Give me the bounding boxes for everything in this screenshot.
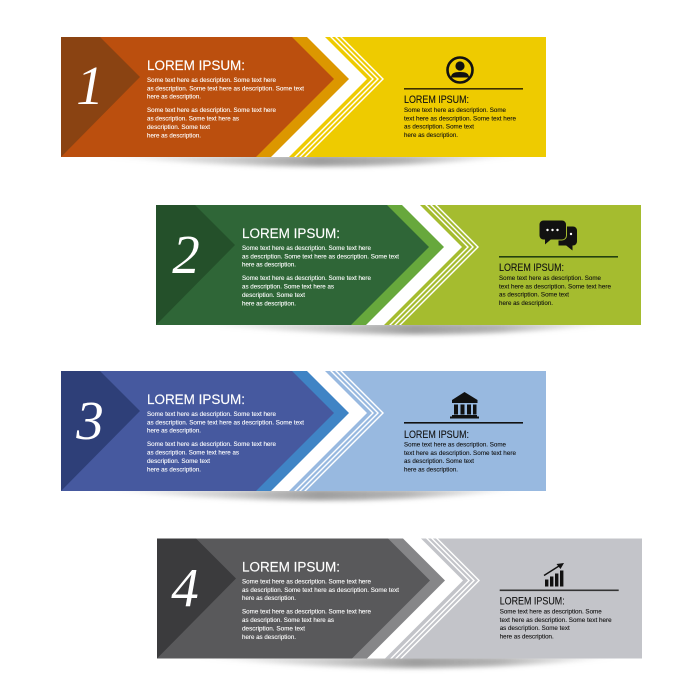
left description: Some text here as description. Some text here bbox=[147, 77, 276, 84]
left heading: LOREM IPSUM: bbox=[147, 392, 245, 407]
left description: Some text here as description. Some text here bbox=[242, 275, 371, 282]
number 1: 1 bbox=[76, 55, 104, 116]
left description: description. Some text bbox=[147, 124, 210, 131]
left description: Some text here as description. Some text here bbox=[242, 245, 371, 252]
shadow 4 bbox=[191, 656, 621, 668]
right description: here as description. bbox=[500, 634, 554, 640]
left description: as description. Some text here as description. Some text bbox=[147, 86, 304, 92]
panel: grey background bbox=[157, 538, 642, 658]
accent chevron bbox=[61, 371, 349, 491]
left description: Some text here as description. Some text here bbox=[147, 441, 276, 448]
right heading: LOREM IPSUM: bbox=[404, 429, 469, 441]
left description: here as description. bbox=[147, 94, 201, 100]
accent chevron bbox=[157, 538, 445, 658]
right description: as description. Some text bbox=[404, 458, 474, 465]
right description: Some text here as description. Some bbox=[500, 608, 602, 616]
divider bbox=[404, 422, 523, 424]
icon: person bbox=[448, 58, 472, 82]
right description: here as description. bbox=[499, 300, 553, 307]
left description: description. Some text bbox=[242, 292, 305, 299]
number 3: 3 bbox=[75, 390, 104, 451]
number triangle bbox=[61, 37, 140, 157]
left description: as description. Some text here as description. Some text bbox=[242, 254, 399, 260]
number 4: 4 bbox=[171, 558, 199, 618]
main arrow bbox=[156, 205, 429, 325]
left heading: LOREM IPSUM: bbox=[242, 560, 340, 574]
left description: as description. Some text here as description. Some text bbox=[242, 587, 399, 594]
white stripes chevron bbox=[157, 538, 480, 658]
left description bbox=[242, 578, 399, 641]
right heading: LOREM IPSUM: bbox=[499, 262, 564, 274]
right description: here as description. bbox=[404, 132, 458, 139]
icon: bank building bbox=[450, 392, 479, 418]
shadow 3 bbox=[95, 489, 525, 500]
accent chevron bbox=[156, 205, 444, 325]
right description bbox=[404, 442, 516, 474]
divider bbox=[499, 256, 618, 258]
left description: as description. Some text here as bbox=[242, 284, 334, 290]
left description: Some text here as description. Some text here bbox=[147, 411, 276, 418]
right description: Some text here as description. Some bbox=[404, 107, 506, 114]
banner 1 bbox=[61, 37, 546, 166]
white stripes chevron bbox=[61, 371, 384, 491]
left description: Some text here as description. Some text here bbox=[242, 608, 371, 616]
left heading: LOREM IPSUM: bbox=[147, 58, 245, 73]
number triangle bbox=[157, 538, 236, 658]
right heading: LOREM IPSUM: bbox=[404, 94, 469, 106]
left description: here as description. bbox=[242, 262, 296, 268]
main arrow bbox=[61, 37, 334, 157]
left heading: LOREM IPSUM: bbox=[242, 226, 340, 241]
panel: green background bbox=[156, 205, 641, 325]
left description bbox=[242, 245, 399, 308]
shadow 2 bbox=[190, 323, 620, 334]
right description: Some text here as description. Some bbox=[499, 275, 601, 282]
right heading: LOREM IPSUM: bbox=[500, 596, 565, 608]
left description: Some text here as description. Some text here bbox=[147, 107, 276, 114]
left description: here as description. bbox=[242, 634, 296, 641]
right description: Some text here as description. Some bbox=[404, 442, 506, 448]
left description: here as description. bbox=[147, 132, 201, 140]
right description: as description. Some text bbox=[500, 625, 570, 632]
icon: chat bubbles bbox=[539, 220, 578, 252]
left description: as description. Some text here as bbox=[147, 116, 239, 122]
left description: as description. Some text here as description. Some text bbox=[147, 420, 304, 426]
right description: as description. Some text bbox=[499, 292, 569, 299]
right description: text here as description. Some text here bbox=[500, 617, 612, 624]
left description bbox=[147, 411, 304, 474]
accent chevron bbox=[61, 37, 349, 157]
number triangle bbox=[61, 371, 140, 491]
right description: here as description. bbox=[404, 466, 458, 474]
main arrow bbox=[157, 538, 430, 658]
left description: here as description. bbox=[147, 428, 201, 434]
left description bbox=[147, 77, 304, 140]
divider bbox=[404, 88, 523, 90]
banner 3 bbox=[61, 371, 546, 500]
right description bbox=[500, 608, 612, 640]
main arrow bbox=[61, 371, 334, 491]
right description: as description. Some text bbox=[404, 124, 474, 131]
left description: description. Some text bbox=[242, 626, 305, 632]
right description: text here as description. Some text here bbox=[499, 284, 611, 290]
banner 4 bbox=[157, 538, 642, 668]
left description: as description. Some text here as bbox=[242, 617, 334, 624]
right description: text here as description. Some text here bbox=[404, 116, 516, 122]
left description: Some text here as description. Some text here bbox=[242, 578, 371, 586]
icon: growth chart bbox=[544, 563, 564, 586]
right description bbox=[404, 107, 516, 139]
shadow 1 bbox=[95, 155, 525, 166]
panel: blue background bbox=[61, 371, 546, 491]
number 2: 2 bbox=[172, 224, 200, 285]
left description: as description. Some text here as bbox=[147, 450, 239, 456]
left description: description. Some text bbox=[147, 458, 210, 465]
white stripes chevron bbox=[61, 37, 384, 157]
left description: here as description. bbox=[147, 466, 201, 474]
left description: here as description. bbox=[242, 595, 296, 602]
white stripes chevron bbox=[156, 205, 479, 325]
right description bbox=[499, 275, 611, 307]
banner 2 bbox=[156, 205, 641, 334]
right description: text here as description. Some text here bbox=[404, 450, 516, 457]
divider bbox=[500, 590, 619, 591]
number triangle bbox=[156, 205, 235, 325]
panel: yellow background bbox=[61, 37, 546, 157]
left description: here as description. bbox=[242, 300, 296, 308]
